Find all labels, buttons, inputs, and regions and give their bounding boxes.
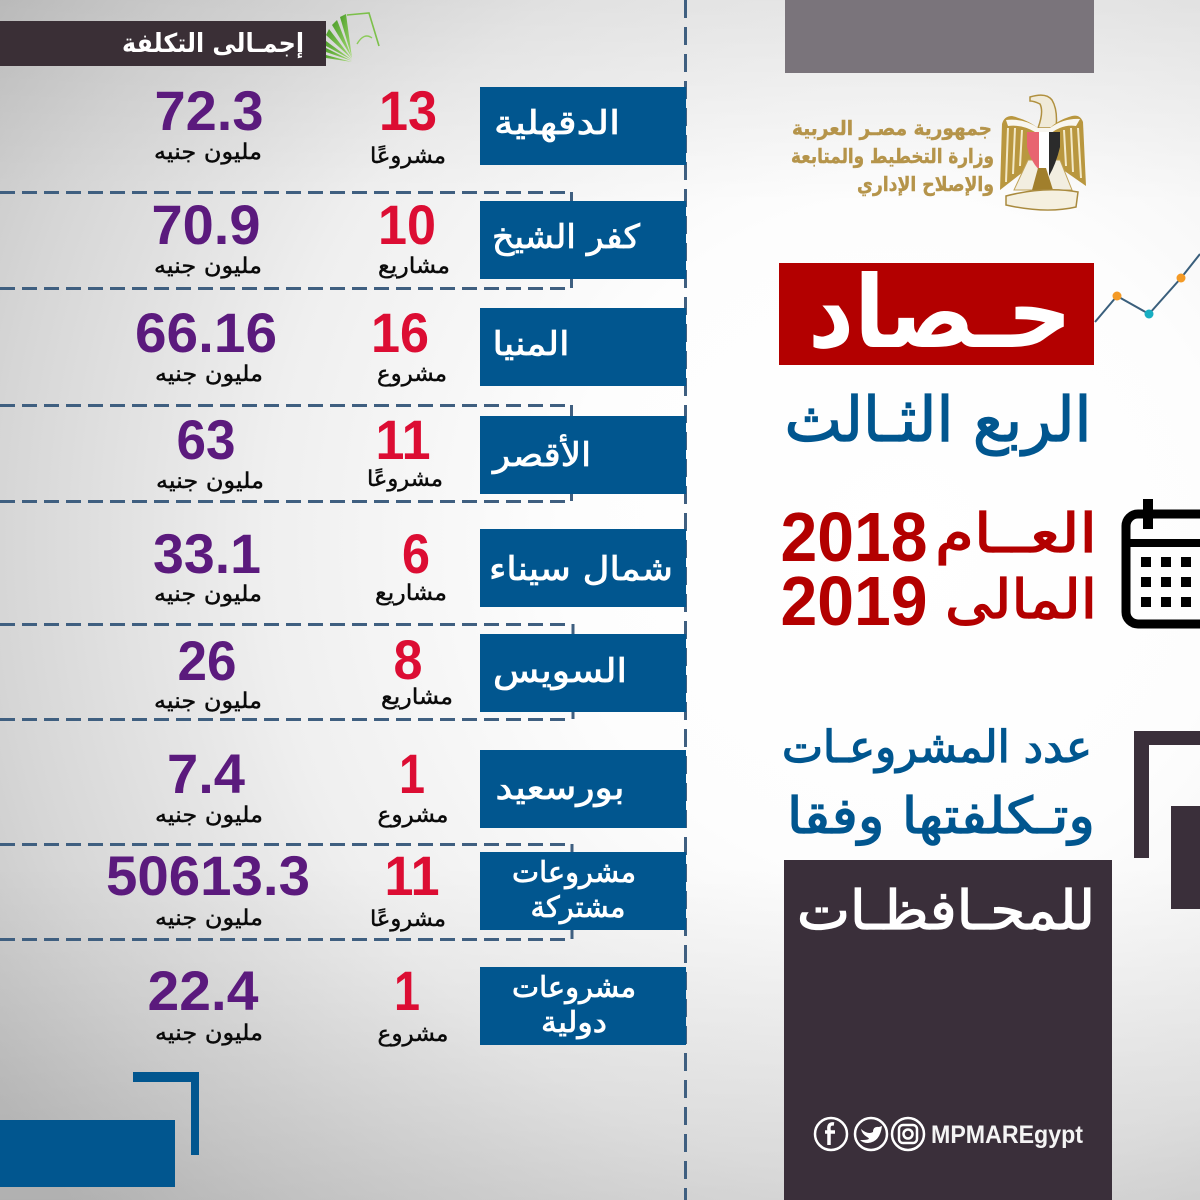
row: Joint projects: 11 xyxy=(384,844,440,907)
row: International projects: مليون جنيه xyxy=(155,1021,263,1046)
icon: Egyptian eagle emblem xyxy=(1000,95,1086,210)
row: Minya: 16 xyxy=(371,301,429,364)
row: Port Said: بورسعيد xyxy=(496,768,624,807)
row: International projects: مشروع xyxy=(378,1022,448,1047)
row: North Sinai: شمال سيناء xyxy=(489,549,673,588)
row: Dakahlia xyxy=(154,79,686,169)
header: total cost xyxy=(0,13,379,66)
row: North Sinai: 6 xyxy=(402,522,430,585)
row: Dakahlia: مليون جنيه xyxy=(154,140,262,165)
row: Kafr El-Sheikh: 70.9 xyxy=(152,193,260,256)
row: Luxor: مليون جنيه xyxy=(156,469,264,494)
icon: calendar xyxy=(1126,499,1200,624)
row: Suez: مليون جنيه xyxy=(154,689,262,714)
row: Dakahlia: مشروعًا xyxy=(370,144,446,169)
chest xyxy=(1014,160,1072,190)
row: Luxor xyxy=(156,408,686,494)
row: Minya xyxy=(135,301,686,387)
row: North Sinai: مليون جنيه xyxy=(154,582,262,607)
decoration: blue corner block xyxy=(0,1072,199,1187)
row: Joint projects: مشروعًا xyxy=(370,907,446,932)
row: Minya: مشروع xyxy=(377,362,447,387)
heading: third quarter: الربع الثـالث xyxy=(784,383,1092,456)
social icons xyxy=(815,1118,924,1150)
row: North Sinai: مشاريع xyxy=(375,581,447,606)
row: Kafr El-Sheikh: مشاريع xyxy=(378,254,450,279)
row: International projects: مشروعات xyxy=(512,970,636,1004)
row: International projects: 22.4 xyxy=(148,959,258,1022)
heading: fiscal year: العــام xyxy=(935,502,1097,565)
row: Luxor: 11 xyxy=(376,408,430,471)
row: Suez: 26 xyxy=(178,629,236,692)
top gray block xyxy=(785,0,1094,73)
row: Kafr El-Sheikh: 10 xyxy=(378,193,436,256)
decoration: dark corner block xyxy=(1134,731,1200,909)
row: Dakahlia: الدقهلية xyxy=(494,103,620,142)
row: Kafr El-Sheikh: مليون جنيه xyxy=(154,254,262,279)
logo text: ministry name xyxy=(791,116,994,197)
row: International projects: دولية xyxy=(541,1005,607,1039)
shield xyxy=(1027,132,1039,170)
panel: governorates and social handles: MPMAREgypt xyxy=(931,1121,1084,1149)
row: North Sinai xyxy=(153,522,686,607)
row: Luxor: الأقصر xyxy=(491,434,591,474)
scroll xyxy=(1006,190,1078,210)
logo text: ministry name: وزارة التخطيط والمتابعة xyxy=(791,144,994,168)
icon: money banknotes xyxy=(326,13,379,62)
chart line decoration xyxy=(1095,254,1200,322)
row: Suez xyxy=(154,628,686,714)
row: Joint projects: 50613.3 xyxy=(106,844,310,907)
heading: fiscal year xyxy=(780,498,1097,640)
row: Port Said: مليون جنيه xyxy=(155,803,263,828)
logo text: ministry name: جمهورية مصـر العربية xyxy=(792,116,992,140)
row: Dakahlia: 72.3 xyxy=(154,79,264,142)
row: Port Said: مشروع xyxy=(378,803,448,828)
panel: governorates and social handles xyxy=(784,860,1112,1200)
row: Kafr El-Sheikh: كفر الشيخ xyxy=(492,217,640,256)
title: harvest: حـصاد xyxy=(808,254,1072,371)
row: Port Said: 1 xyxy=(399,742,425,805)
heading: number of projects and their cost: عدد المشروعـات xyxy=(782,722,1092,773)
row: Joint projects: مشتركة xyxy=(530,890,626,924)
row: Port Said xyxy=(155,742,686,828)
heading: number of projects and their cost: وتـكلفتها وفقا xyxy=(787,787,1095,846)
row: Dakahlia: 13 xyxy=(379,79,437,142)
row: Luxor: 63 xyxy=(176,408,236,471)
row: International projects: 1 xyxy=(394,959,420,1022)
logo text: ministry name: والإصلاح الإداري xyxy=(857,172,994,197)
wings xyxy=(1000,116,1038,190)
row: Joint projects: مشروعات xyxy=(512,855,636,889)
row: Port Said: 7.4 xyxy=(167,742,245,805)
row: Minya: 66.16 xyxy=(135,301,277,364)
row: Luxor: مشروعًا xyxy=(367,467,443,492)
heading: fiscal year: 2019 xyxy=(780,562,928,640)
row: Minya: مليون جنيه xyxy=(155,362,263,387)
row: Joint projects: مليون جنيه xyxy=(155,906,263,931)
row: Joint projects xyxy=(106,844,686,932)
row: North Sinai: 33.1 xyxy=(153,522,261,585)
row: International projects xyxy=(148,959,686,1047)
row: Suez: السويس xyxy=(493,651,627,690)
heading: fiscal year: المالى xyxy=(945,568,1097,631)
row: Suez: مشاريع xyxy=(381,685,453,710)
header: total cost: إجمـالى التكلفة xyxy=(122,29,304,59)
row: Kafr El-Sheikh xyxy=(152,193,686,279)
row: Minya: المنيا xyxy=(492,324,570,363)
row: Suez: 8 xyxy=(394,628,422,691)
heading: fiscal year: 2018 xyxy=(780,498,928,576)
panel: governorates and social handles: للمحـافظـات xyxy=(797,879,1095,942)
heading: number of projects and their cost xyxy=(782,722,1095,846)
head xyxy=(1030,95,1056,128)
